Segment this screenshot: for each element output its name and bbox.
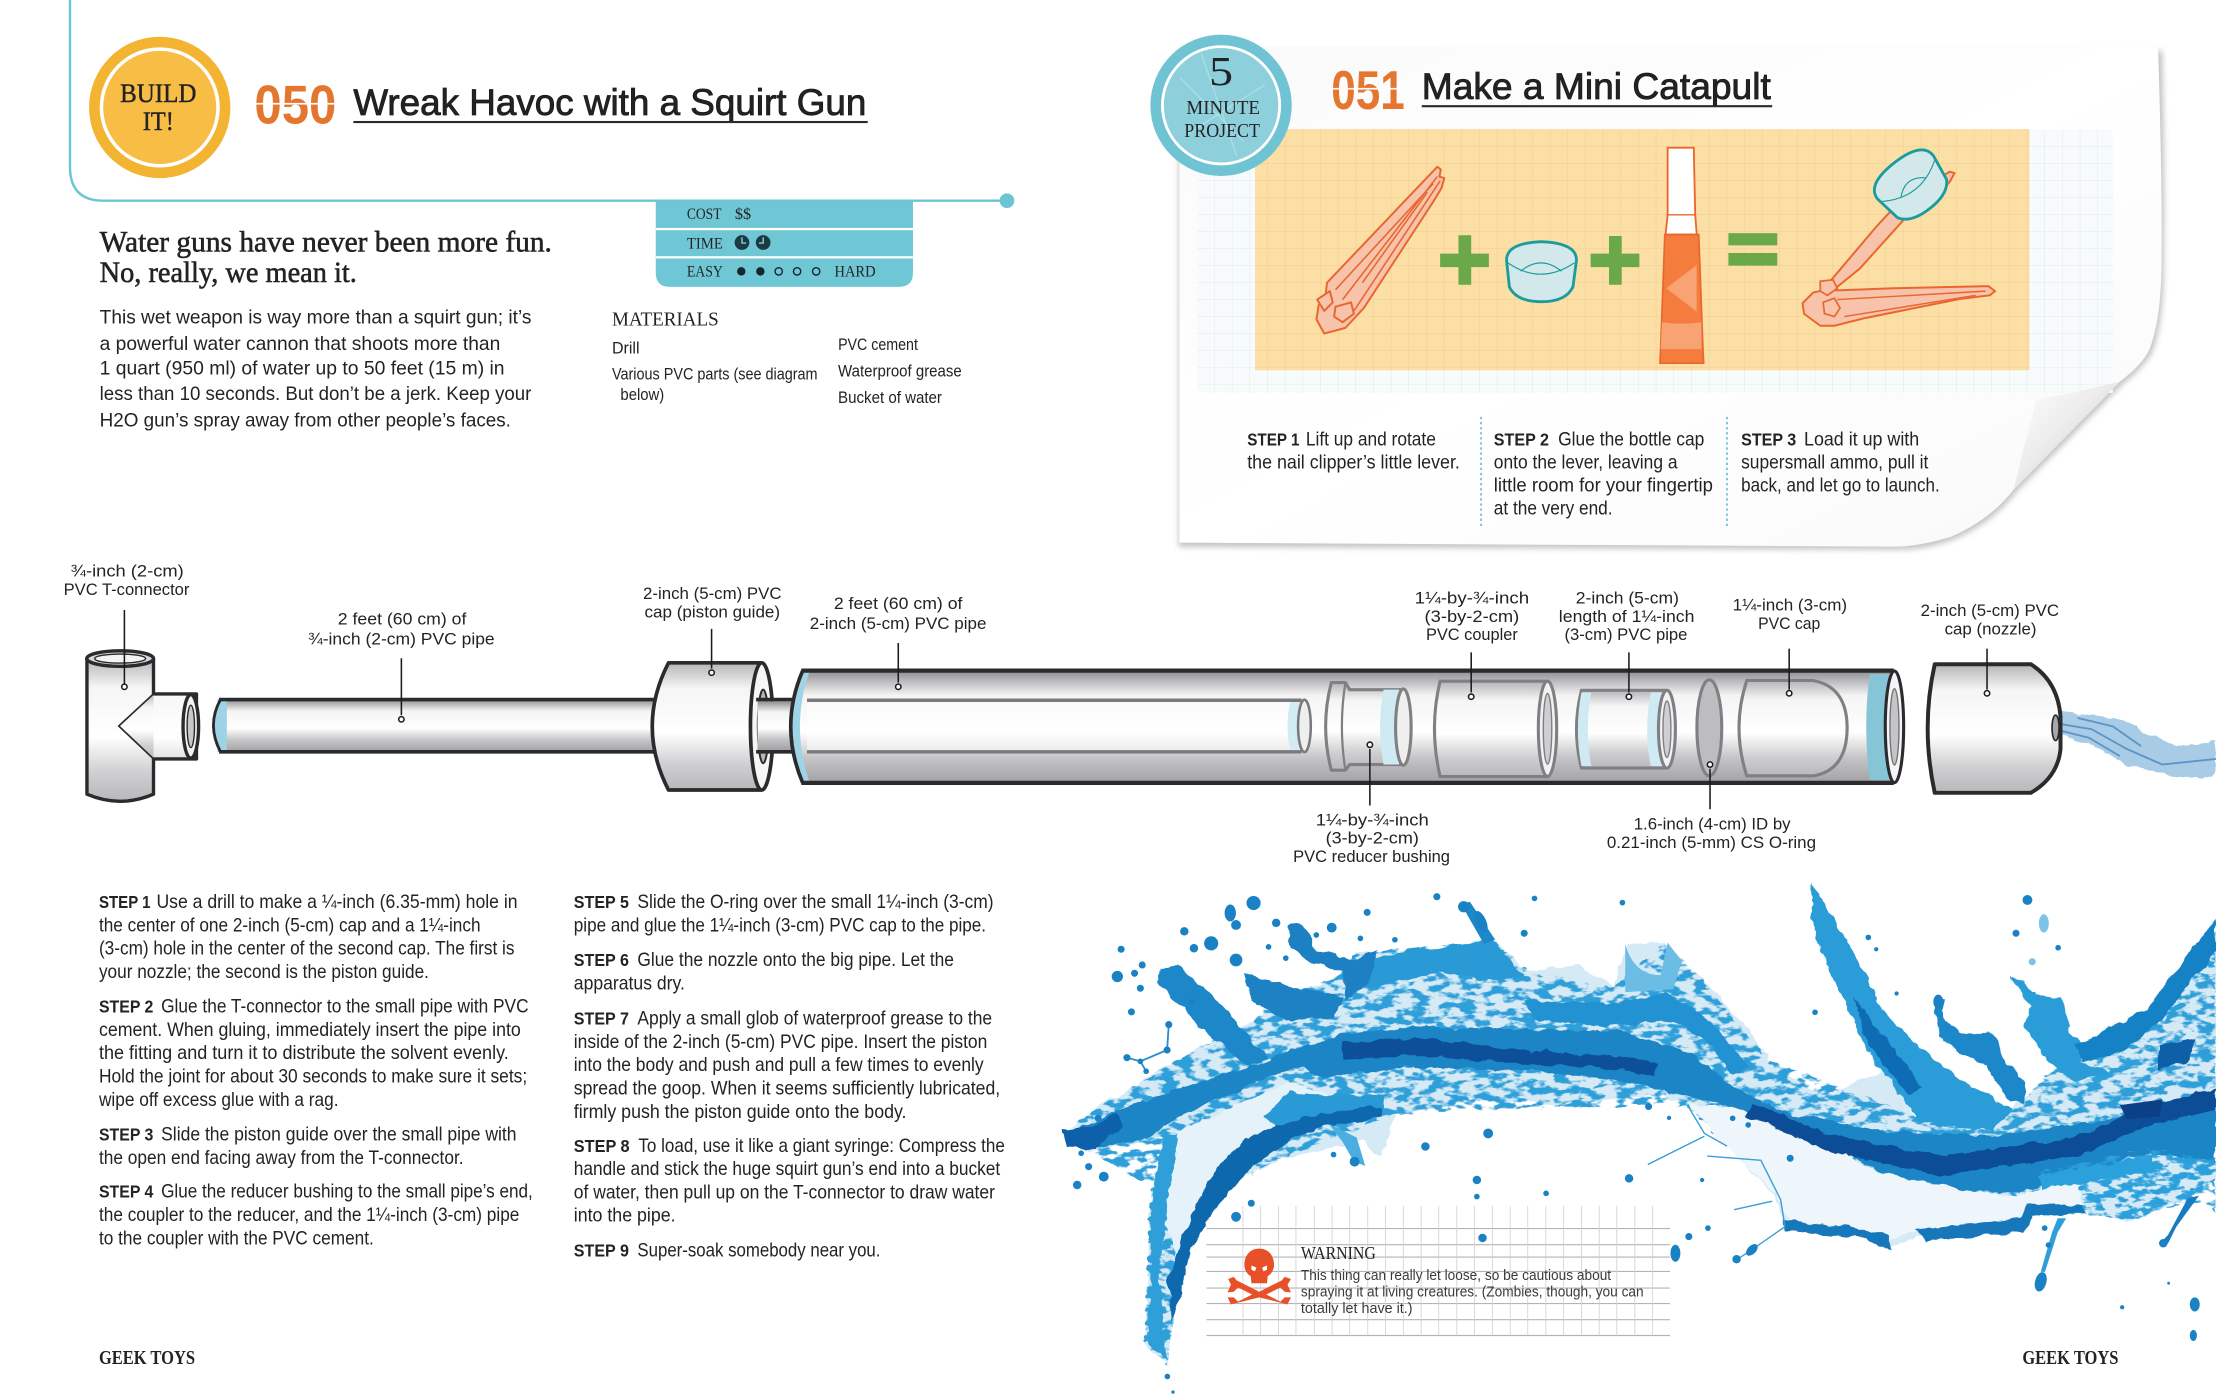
materials list: below): [620, 385, 664, 404]
step 7: spread the goop. When it seems sufficiently lubricated,: [574, 1077, 1000, 1099]
catapult step 1: STEP 1: [1247, 430, 1300, 450]
rating box: cost, time, difficulty: COST: [687, 206, 722, 223]
splash arm 2: [1245, 972, 1343, 1020]
step 9: STEP 9: [574, 1240, 629, 1260]
step 7: firmly push the piston guide onto the body.: [574, 1101, 906, 1123]
label: small pipe: 2 feet (60 cm) of: [338, 611, 467, 629]
mottling: [1063, 920, 2216, 1367]
catapult step 1: the nail clipper’s little lever.: [1247, 451, 1460, 473]
badge: 5 minute project: 5: [1209, 48, 1233, 94]
warning box: spraying it at living creatures. (Zombies, though, you can: [1301, 1285, 1644, 1301]
label: O-ring: 0.21-inch (5-mm) CS O-ring: [1607, 834, 1816, 852]
step 5: STEP 5: [574, 892, 629, 912]
label: short pipe: length of 1¼-inch: [1559, 608, 1694, 626]
materials list: PVC cement: [838, 335, 918, 354]
step 2: the fitting and turn it to distribute the solvent evenly.: [99, 1042, 509, 1064]
paper curl flap: [2013, 382, 2120, 490]
step 7: into the body and push and pull a few times to evenly: [574, 1054, 984, 1076]
label: nozzle: 2-inch (5-cm) PVC: [1921, 602, 2059, 620]
step 2: Hold the joint for about 30 seconds to make sure it sets;: [99, 1066, 527, 1088]
blue patch in arch: [1265, 1092, 1385, 1131]
label: piston guide: cap (piston guide): [644, 604, 780, 622]
label: short pipe: (3-cm) PVC pipe: [1564, 626, 1687, 644]
label: coupler: 1¼-by-¾-inch: [1415, 589, 1529, 607]
label: O-ring: [1607, 816, 1816, 852]
intro heading: Water guns have never been more fun.: [100, 227, 552, 259]
footer right: GEEK TOYS: [2022, 1347, 2118, 1369]
pale left arch: [1162, 1083, 1385, 1258]
intro heading: No, really, we mean it.: [100, 257, 357, 289]
upper band: [1526, 993, 1750, 1074]
water from nozzle: [2052, 711, 2216, 779]
icon: skull and crossbones: [1228, 1249, 1291, 1304]
left tip: [1063, 1112, 1124, 1149]
title: squirt gun: Wreak Havoc with a Squirt Gun: [353, 81, 866, 123]
main body pipe: [791, 671, 1904, 783]
step 6: [574, 949, 954, 994]
warning box: This thing can really let loose, so be cautious about: [1301, 1268, 1612, 1284]
step 3: [99, 1123, 517, 1169]
step 3: the open end facing away from the T-connector.: [99, 1147, 464, 1169]
step 2: STEP 2: [99, 997, 154, 1017]
T-connector: [87, 651, 199, 801]
web lines: [1648, 1105, 1785, 1261]
header frame line: [70, 0, 1014, 208]
label: PVC cap: [1733, 597, 1847, 633]
label: O-ring: 1.6-inch (4-cm) ID by: [1634, 816, 1791, 834]
project number 051: 051: [1331, 59, 1405, 121]
step 1: (3-cm) hole in the center of the second cap. The first is: [99, 938, 515, 960]
droplets: [1073, 893, 2200, 1394]
icon: assembled catapult: [1803, 141, 1995, 326]
label: nozzle: [1921, 602, 2059, 639]
label: nozzle: cap (nozzle): [1945, 621, 2036, 639]
materials list: Waterproof grease: [838, 361, 962, 380]
pale lower sheet: [1689, 1107, 2085, 1239]
label: coupler: PVC coupler: [1426, 626, 1518, 644]
step 8: handle and stick the huge squirt gun’s end into a bucket: [574, 1158, 1001, 1180]
step 7: STEP 7: [574, 1009, 629, 1029]
small pipe: [213, 700, 656, 752]
rating box: cost, time, difficulty: EASY: [687, 264, 723, 281]
intro text: H2O gun’s spray away from other people’s faces.: [100, 409, 511, 431]
label: PVC cap: PVC cap: [1758, 615, 1820, 633]
label: reducer bushing: [1293, 811, 1450, 866]
label: short pipe: [1559, 589, 1694, 644]
project number 050: 050: [254, 74, 336, 136]
step 9: [574, 1239, 880, 1261]
step 1: the center of one 2-inch (5-cm) cap and a 1¼-inch: [99, 914, 481, 936]
step 4: to the coupler with the PVC cement.: [99, 1227, 374, 1249]
catapult step 3: STEP 3: [1741, 430, 1796, 450]
tail streak: [1148, 1133, 1179, 1364]
step 1: STEP 1: [99, 892, 151, 912]
icon: glue tube: [1660, 148, 1704, 363]
step 2: [98, 996, 529, 1111]
title: mini catapult: Make a Mini Catapult: [1422, 65, 1771, 107]
warning box: totally let have it.): [1301, 1301, 1413, 1317]
arch dark curve: [1167, 1107, 1382, 1321]
splash arm 1: [1157, 967, 1268, 1067]
leader lines: [122, 610, 1990, 809]
splash arm 4: [1461, 902, 1495, 944]
catapult step 1: Lift up and rotate: [1306, 429, 1436, 451]
step 2: cement. When gluing, immediately insert the pipe into: [99, 1019, 521, 1041]
piston guide cap: [652, 663, 794, 790]
drips: [2159, 1196, 2199, 1244]
step 1: your nozzle; the second is the piston guide.: [99, 961, 429, 983]
navy core: [1343, 1039, 1656, 1074]
rating box: cost, time, difficulty: $$: [735, 206, 751, 223]
intro text: a powerful water cannon that shoots more than: [100, 333, 500, 355]
left arm band: [1064, 1043, 1321, 1148]
step 7: [574, 1008, 1000, 1123]
label: big pipe: 2-inch (5-cm) PVC pipe: [810, 615, 986, 633]
step 2: wipe off excess glue with a rag.: [98, 1089, 338, 1111]
label: coupler: (3-by-2-cm): [1425, 608, 1519, 626]
water splash: [1063, 882, 2216, 1394]
label: coupler: [1415, 589, 1529, 644]
materials list: Drill: [612, 338, 640, 357]
splash blob: [1933, 996, 2025, 1105]
icon: bottle cap: [1507, 242, 1576, 302]
step 3: Slide the piston guide over the small pipe with: [161, 1123, 517, 1145]
step 1: [99, 891, 518, 983]
materials list: Bucket of water: [838, 388, 942, 407]
badge: build it: [89, 37, 230, 178]
catapult step 3: supersmall ammo, pull it: [1741, 451, 1929, 473]
label: small pipe: [308, 611, 495, 648]
squirt gun diagram: [87, 610, 2216, 809]
label: T-connector: [64, 563, 190, 599]
catapult step 2: at the very end.: [1494, 497, 1613, 519]
warning box: WARNING: [1301, 1243, 1376, 1263]
step 8: into the pipe.: [574, 1205, 676, 1227]
step 4: [99, 1181, 533, 1249]
rating box: cost, time, difficulty: [656, 201, 913, 287]
right wave: [1812, 882, 2014, 1131]
inner small pipe: [807, 700, 1311, 752]
icon: plus: [1591, 236, 1639, 285]
warning box: [1207, 1206, 1670, 1336]
step 4: Glue the reducer bushing to the small pipe’s end,: [161, 1181, 533, 1203]
badge: build it: BUILD: [120, 78, 196, 108]
catapult step 2: Glue the bottle cap: [1558, 429, 1704, 451]
badge: 5 minute project: PROJECT: [1184, 120, 1260, 142]
splash loop: [2011, 975, 2113, 1081]
catapult step 3: Load it up with: [1804, 429, 1919, 451]
rating box: cost, time, difficulty: HARD: [835, 264, 876, 281]
label: PVC cap: 1¼-inch (3-cm): [1733, 597, 1847, 615]
catapult step 3: [1741, 429, 1940, 496]
label: reducer bushing: (3-by-2-cm): [1326, 830, 1419, 848]
step 8: of water, then pull up on the T-connector to draw water: [574, 1181, 995, 1203]
badge: build it: IT!: [143, 106, 174, 136]
badge: 5 minute project: [1150, 35, 1292, 176]
pale water body: [1063, 920, 2216, 1367]
illustration panel background: [1255, 129, 2029, 370]
O-ring: [1697, 680, 1722, 776]
label: big pipe: 2 feet (60 cm) of: [834, 595, 963, 613]
nozzle cap: [1928, 664, 2061, 793]
sheet lower edge: [1784, 1204, 2086, 1249]
label: T-connector: PVC T-connector: [64, 581, 190, 599]
step 6: Glue the nozzle onto the big pipe. Let the: [637, 949, 954, 971]
step 8: STEP 8: [574, 1136, 630, 1156]
steps column 1: [98, 891, 533, 1249]
label: big pipe: [810, 595, 986, 633]
step 6: apparatus dry.: [574, 972, 685, 994]
catapult step 3: back, and let go to launch.: [1741, 474, 1940, 496]
panel: mini catapult paper: [1179, 47, 2164, 550]
label: T-connector: ¾-inch (2-cm): [71, 563, 184, 581]
short pipe: [1576, 690, 1675, 768]
label: piston guide: [643, 585, 782, 622]
step 3: STEP 3: [99, 1124, 154, 1144]
step 7: inside of the 2-inch (5-cm) PVC pipe. Insert the piston: [574, 1031, 987, 1053]
materials list: [612, 309, 962, 407]
top of wave: [1350, 940, 1523, 989]
step 9: Super-soak somebody near you.: [637, 1239, 880, 1261]
dividers between catapult steps: [1481, 417, 1727, 529]
intro text: This wet weapon is way more than a squirt gun; it’s: [100, 307, 532, 329]
label: small pipe: ¾-inch (2-cm) PVC pipe: [308, 630, 495, 648]
label: reducer bushing: 1¼-by-¾-inch: [1316, 811, 1429, 829]
reducer bushing: [1326, 683, 1411, 770]
step 8: [574, 1135, 1005, 1227]
graph grid: [1207, 1229, 1670, 1336]
catapult step 1: [1247, 429, 1460, 473]
cap inside pipe: [1739, 680, 1847, 776]
step 5: pipe and glue the 1¼-inch (3-cm) PVC cap to the pipe.: [574, 914, 986, 936]
materials list: Various PVC parts (see diagram: [612, 364, 818, 383]
center blue band: [1289, 1026, 2216, 1193]
step 5: Slide the O-ring over the small 1¼-inch (3-cm): [637, 891, 994, 913]
rating box: cost, time, difficulty: TIME: [687, 235, 723, 252]
step 8: To load, use it like a giant syringe: Compress the: [638, 1135, 1005, 1157]
icon: closed nail clipper: [1316, 167, 1444, 334]
step 1: Use a drill to make a ¼-inch (6.35-mm) hole in: [156, 891, 518, 913]
label: short pipe: 2-inch (5-cm): [1576, 589, 1679, 607]
catapult step 2: little room for your fingertip: [1494, 474, 1713, 496]
intro text: [100, 307, 532, 431]
splash arm 3: [1287, 924, 1378, 1001]
step 2: Glue the T-connector to the small pipe with PVC: [161, 996, 529, 1018]
step 4: the coupler to the reducer, and the 1¼-inch (3-cm) pipe: [99, 1204, 519, 1226]
intro text: 1 quart (950 ml) of water up to 50 feet (15 m) in: [100, 358, 505, 380]
cyan under river: [2036, 1148, 2216, 1218]
footer left: GEEK TOYS: [99, 1347, 195, 1369]
intro heading: [100, 227, 552, 289]
step 5: [574, 891, 994, 936]
icon: equals: [1728, 233, 1777, 266]
right wave edge: [2075, 919, 2216, 1063]
graph paper: [1197, 130, 2113, 393]
steps column 2: [574, 891, 1005, 1261]
step 7: Apply a small glob of waterproof grease to the: [637, 1008, 992, 1030]
badge: 5 minute project: MINUTE: [1186, 97, 1260, 119]
step 4: STEP 4: [99, 1182, 154, 1202]
step 6: STEP 6: [574, 950, 629, 970]
intro text: less than 10 seconds. But don’t be a jerk. Keep your: [100, 383, 532, 405]
catapult step 2: onto the lever, leaving a: [1494, 451, 1678, 473]
label: reducer bushing: PVC reducer bushing: [1293, 848, 1450, 866]
label: piston guide: 2-inch (5-cm) PVC: [643, 585, 782, 603]
catapult step 2: STEP 2: [1494, 430, 1549, 450]
materials list: MATERIALS: [612, 309, 719, 331]
coupler: [1434, 681, 1557, 777]
icon: plus: [1440, 235, 1489, 285]
catapult step 2: [1494, 429, 1713, 519]
